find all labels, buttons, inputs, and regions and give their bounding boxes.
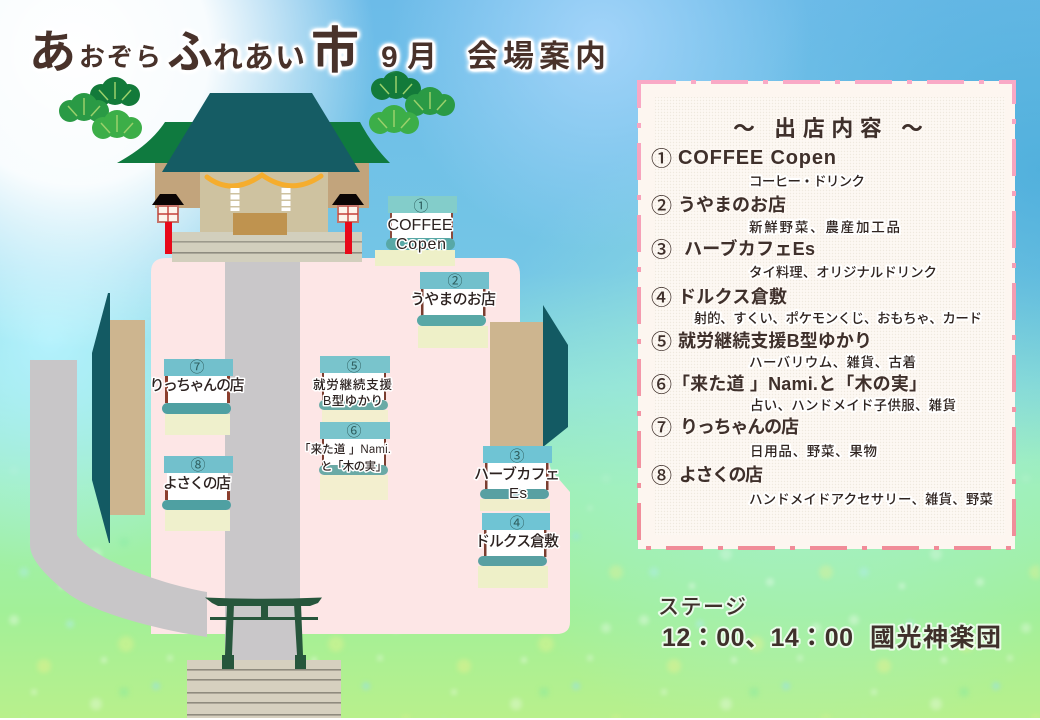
shop 6 [651, 369, 956, 413]
shop 6: 「来た道 」Nami.と「木の実」 [672, 374, 927, 394]
shop 1 [651, 143, 865, 189]
stall 8: よさくの店: ⑧ [190, 454, 206, 475]
stage information: 12：00、14：00 [662, 624, 853, 652]
stall 4: ドルクス倉敷 [475, 512, 559, 588]
shop 3: ③ [651, 234, 672, 264]
shop 7: りっちゃんの店 [680, 417, 799, 437]
stall 3: ハーブカフェ Es: ③ [509, 445, 525, 466]
stall 1: COFFEE Copen: COFFEE [388, 217, 452, 234]
title: おぞら [79, 42, 161, 72]
stall 2: うやまのお店: うやまのお店 [410, 291, 496, 308]
shop 5: ハーバリウム、雑貨、古着 [749, 354, 916, 370]
shrine steps [172, 232, 362, 262]
panel: shop list [638, 81, 1015, 549]
right side building [490, 305, 568, 450]
title [29, 23, 606, 79]
stall 1: COFFEE Copen: ① [413, 195, 429, 216]
shop 3 [651, 234, 937, 280]
stall 5: 就労継続支援B型ゆかり: B型ゆかり [323, 394, 383, 408]
sacred rope [207, 175, 321, 211]
venue ground: pink area [151, 258, 570, 634]
shop 3: ハーブカフェEs [684, 238, 815, 259]
shop 1: COFFEE Copen [678, 147, 836, 169]
title: れあい [213, 42, 305, 75]
stall 2: うやまのお店: ② [447, 270, 463, 291]
shop 7 [651, 412, 877, 459]
stall 8: よさくの店 [162, 454, 233, 531]
shop 6: ⑥ [651, 369, 672, 399]
left side building [92, 293, 145, 543]
stage information: ステージ [658, 596, 746, 619]
stall 3: ハーブカフェ Es: ハーブカフェ [474, 465, 560, 483]
stall 7: りっちゃんの店: りっちゃんの店 [150, 377, 244, 394]
title: 会場案内 [467, 39, 606, 74]
stall 6: 来た道 Nami. と 木の実: 「来た道 」Nami. [299, 442, 391, 456]
stall 3: ハーブカフェ Es: Es [509, 485, 527, 502]
shop 4: ④ [651, 282, 672, 312]
shop 8: ⑧ [651, 460, 672, 490]
stall 8: よさくの店: よさくの店 [163, 475, 231, 492]
panel dashed border [639, 82, 1014, 548]
shop 7: 日用品、野菜、果物 [750, 444, 877, 459]
shop 4: 射的、すくい、ポケモンくじ、おもちゃ、カード [694, 311, 982, 326]
title: あ [29, 26, 76, 78]
main roof teal [162, 93, 360, 172]
pine tree right [369, 71, 455, 134]
stall 5: 就労継続支援B型ゆかり: ⑤ [346, 355, 362, 376]
shop 2 [651, 190, 900, 235]
title: 市 [311, 23, 359, 79]
shop 6: 占い、ハンドメイド子供服、雑貨 [750, 397, 956, 413]
stall 4: ドルクス倉敷: ④ [509, 512, 525, 533]
stall 3: ハーブカフェ Es [474, 445, 560, 511]
shop 2: うやまのお店 [678, 195, 786, 215]
shop 3: タイ料理、オリジナルドリンク [749, 265, 937, 280]
shop 8 [651, 460, 994, 507]
shop 1: ① [651, 143, 672, 173]
shop 5: ⑤ [651, 326, 672, 356]
shop 7: ⑦ [651, 412, 672, 442]
panel paper [638, 81, 1015, 549]
shrine building [117, 93, 390, 262]
shop 4 [651, 282, 982, 326]
stall 5: 就労継続支援B型ゆかり: 就労継続支援 [313, 377, 392, 392]
shrine walls [155, 162, 369, 235]
shop 8: よさくの店 [679, 465, 763, 485]
stall 6: 来た道 Nami. と 木の実: と「木の実」 [321, 459, 387, 473]
stage information: 國光神楽団 [870, 624, 1001, 652]
title: 9月 [381, 41, 437, 74]
shop 5 [651, 326, 916, 370]
stall 2: うやまのお店 [410, 270, 496, 348]
stage information [658, 596, 1001, 652]
shop 1: コーヒー・ドリンク [749, 174, 865, 189]
central approach road [225, 262, 300, 667]
shop 8: ハンドメイドアクセサリー、雑貨、野菜 [749, 491, 994, 507]
shop 2: 新鮮野菜、農産加工品 [749, 219, 900, 235]
stall 1: COFFEE Copen: Copen [396, 236, 446, 253]
stall 1: COFFEE Copen [375, 195, 457, 266]
title: ふ [167, 26, 213, 78]
shop 2: ② [651, 190, 672, 220]
torii gate [205, 598, 322, 669]
bottom stone steps [187, 660, 341, 718]
pine tree left [59, 77, 142, 139]
stall 5: 就労継続支援B型ゆかり [313, 355, 392, 422]
right lantern [332, 194, 364, 254]
panel heading: ～ 出店内容 ～ [733, 116, 923, 141]
stall 6: 来た道 Nami. と 木の実: ⑥ [346, 420, 362, 441]
stall 7: りっちゃんの店 [150, 356, 244, 435]
stall 4: ドルクス倉敷: ドルクス倉敷 [475, 532, 559, 550]
shop 4: ドルクス倉敷 [678, 286, 787, 307]
side roof green [117, 122, 390, 163]
shop 5: 就労継続支援B型ゆかり [678, 330, 872, 351]
stall 6: 来た道 Nami. と 木の実 [299, 420, 391, 500]
left lantern [152, 194, 184, 254]
side road [30, 360, 207, 637]
stall 7: りっちゃんの店: ⑦ [189, 356, 205, 377]
